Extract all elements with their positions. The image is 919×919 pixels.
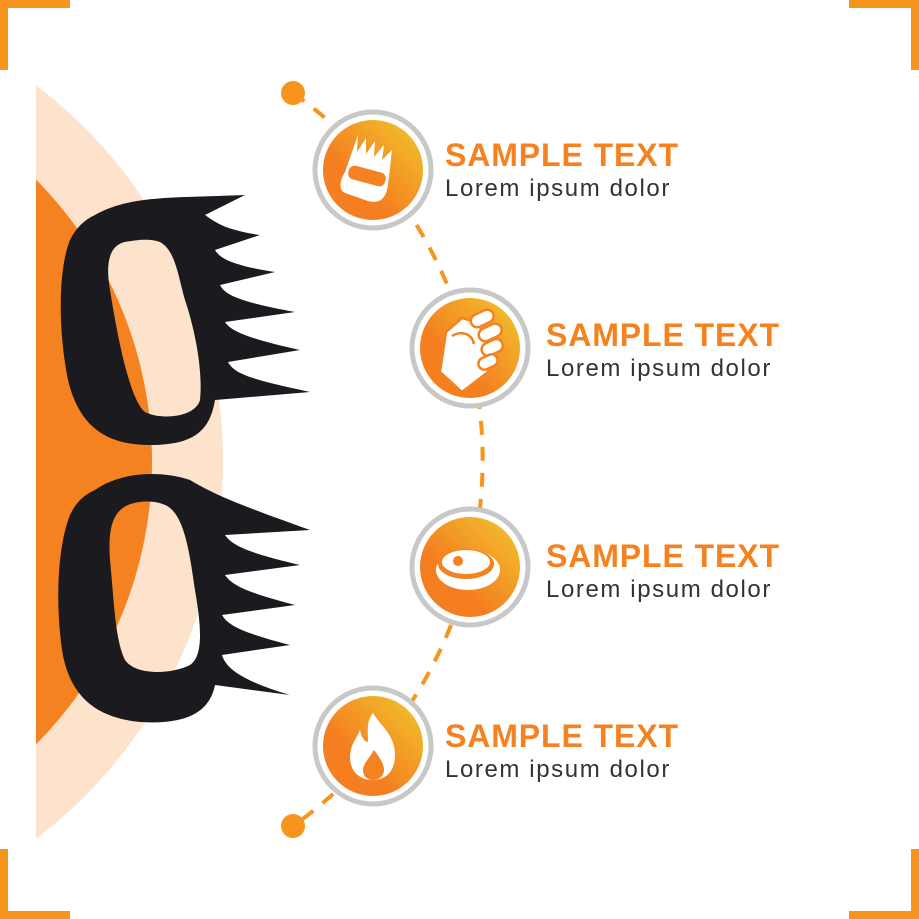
text block 3: SAMPLE TEXT [546,538,780,574]
end dots [281,81,305,838]
claw bottom [58,474,310,722]
icon: claw [340,135,392,202]
background circles [36,86,223,838]
text block 2: SAMPLE TEXT [546,317,780,353]
text block 2 [546,317,780,382]
icon circles [315,112,528,804]
claw top [61,195,310,445]
dashed arc [293,93,483,826]
text block 1: SAMPLE TEXT [445,137,679,173]
text block 2: Lorem ipsum dolor [546,355,772,382]
text block 4: Lorem ipsum dolor [445,756,671,783]
text block 4: SAMPLE TEXT [445,718,679,754]
text block 3: Lorem ipsum dolor [546,576,772,603]
text block 3 [546,538,780,603]
text block 1: Lorem ipsum dolor [445,175,671,202]
icon: fist [440,307,505,392]
text block 4 [445,718,679,783]
text block 1 [445,137,679,202]
icon: steak [436,549,500,590]
icon: flame [350,713,395,780]
